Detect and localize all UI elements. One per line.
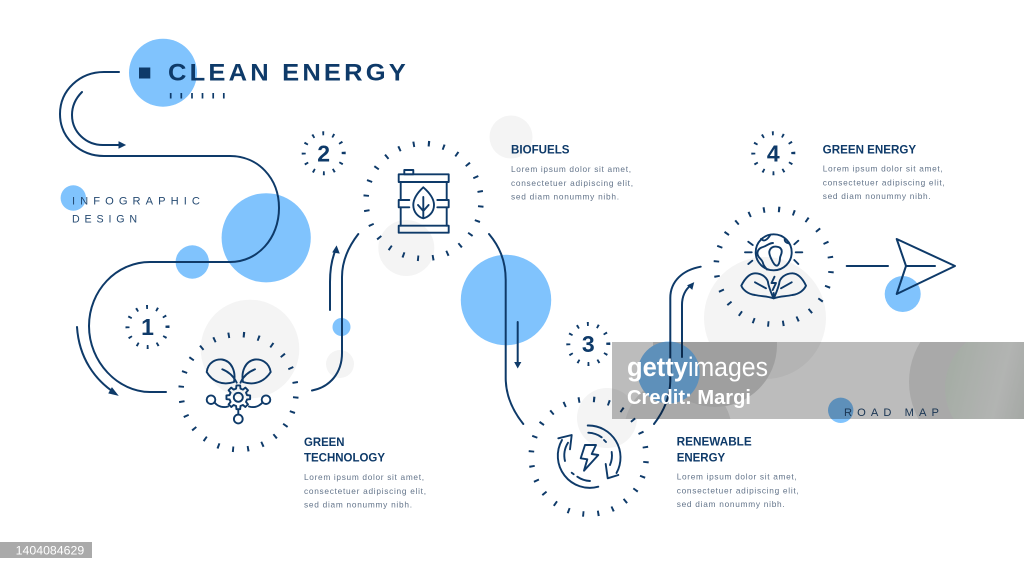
watermark text: Credit: Margi: [627, 387, 751, 409]
arrow: down to step 3: [515, 322, 520, 368]
step 3 ring and icon: renewable energy: [526, 394, 651, 519]
road map path: step 1 to step 2: [312, 234, 358, 390]
watermark text: [627, 352, 768, 409]
image id tag: [0, 542, 92, 558]
text block: renewable energy: sed diam nonummy nibh.: [677, 499, 785, 509]
image id tag: 1404084629: [16, 544, 85, 558]
arrow: up to step 2: [330, 246, 339, 310]
text block: renewable energy: Lorem ipsum dolor sit amet,: [677, 472, 797, 482]
icon: paper plane arrow: [847, 239, 955, 294]
text block: biofuels: sed diam nonummy nibh.: [511, 192, 619, 202]
text block: biofuels: BIOFUELS: [511, 144, 570, 156]
road map label: ROAD MAP: [844, 407, 944, 419]
text block: green technology: [304, 437, 426, 510]
arrow: up to step 4: [682, 283, 694, 357]
road map path: step 3 to step 4: [654, 267, 701, 424]
text block: renewable energy: RENEWABLE: [677, 437, 752, 449]
step 1 number badge: [128, 307, 168, 347]
text block: green technology: sed diam nonummy nibh.: [304, 500, 412, 510]
text block: green technology: Lorem ipsum dolor sit amet,: [304, 472, 424, 482]
step 2 number badge: [304, 133, 344, 173]
step 1 ring and icon: green technology: [176, 329, 301, 455]
step 4 ring and icon: green energy: [711, 204, 836, 329]
arrow: toward step 1: [77, 327, 118, 395]
decorative background circles: [61, 39, 1024, 486]
step 4 number badge: 4: [767, 140, 780, 166]
text block: biofuels: Lorem ipsum dolor sit amet,: [511, 164, 631, 174]
title: CLEAN ENERGY: [168, 60, 409, 87]
watermark text: getty: [627, 352, 688, 382]
step 1 number badge: 1: [141, 314, 154, 340]
text block: renewable energy: [677, 437, 799, 509]
text block: green energy: GREEN ENERGY: [823, 144, 917, 156]
road map path: step 2 to step 3: [489, 234, 523, 424]
text block: green technology: GREEN: [304, 437, 344, 449]
text block: green energy: sed diam nonummy nibh.: [823, 191, 931, 201]
text block: green energy: [823, 144, 945, 201]
step 3 number badge: 3: [582, 331, 595, 357]
text block: biofuels: consectetuer adipiscing elit,: [511, 178, 633, 188]
subtitle: infographic design: [72, 195, 205, 226]
step 2 ring and icon: biofuel barrel: [361, 138, 486, 264]
subtitle: infographic design: INFOGRAPHIC: [72, 195, 205, 207]
text block: green technology: consectetuer adipiscing elit,: [304, 486, 426, 496]
text block: green energy: Lorem ipsum dolor sit amet,: [823, 164, 943, 174]
arrow: top curved: [72, 92, 125, 148]
text block: biofuels: [511, 144, 633, 202]
text block: green technology: TECHNOLOGY: [304, 453, 385, 465]
subtitle: infographic design: DESIGN: [72, 214, 142, 226]
text block: green energy: consectetuer adipiscing elit,: [823, 178, 945, 188]
step 3 number badge: [568, 324, 608, 364]
title: [139, 60, 409, 98]
step 2 number badge: 2: [317, 140, 330, 166]
road map path: section to step 1: [60, 72, 279, 392]
text block: renewable energy: ENERGY: [677, 452, 726, 464]
watermark text: images: [688, 352, 768, 382]
step 4 number badge: [753, 133, 793, 173]
text block: renewable energy: consectetuer adipiscing elit,: [677, 486, 799, 496]
watermark band: [612, 342, 1024, 419]
